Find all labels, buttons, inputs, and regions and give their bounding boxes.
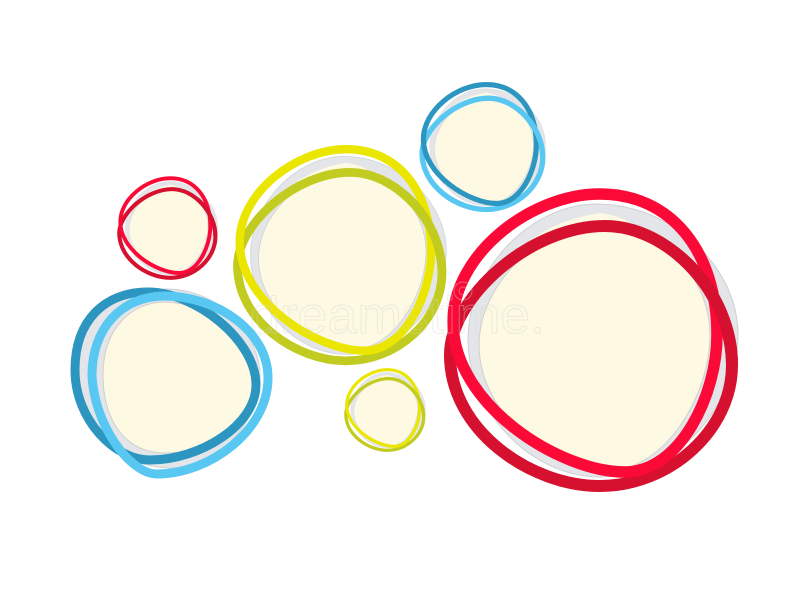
large red ring circle — [450, 194, 738, 486]
small red ring circle — [119, 178, 217, 278]
large blue ring circle — [72, 289, 268, 474]
watermark: dreamstime. — [250, 287, 545, 345]
large yellow ring circle — [238, 149, 446, 361]
small yellow ring circle — [346, 370, 425, 450]
top blue ring circle — [422, 85, 545, 209]
